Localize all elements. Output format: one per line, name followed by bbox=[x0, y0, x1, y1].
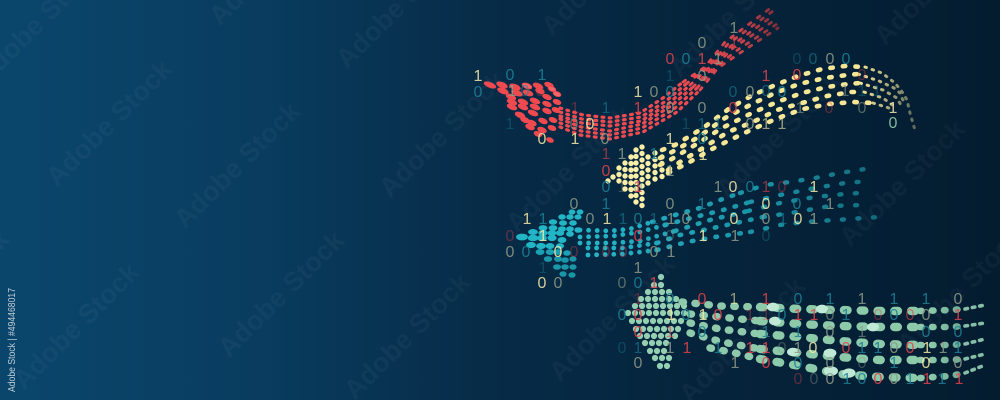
digits: gray: 0 bbox=[666, 100, 675, 117]
digits: red: 1 bbox=[730, 35, 739, 52]
digits: cream: 1 bbox=[474, 68, 483, 85]
green arrow tail edge bbox=[965, 305, 985, 373]
green arrow body near bbox=[682, 302, 760, 359]
digits: teal: 1 bbox=[906, 371, 915, 388]
digits: red: 0 bbox=[634, 228, 643, 245]
digits: cream: 0 bbox=[554, 244, 563, 261]
digits: red: 0 bbox=[874, 371, 883, 388]
digits: cream: 1 bbox=[810, 179, 819, 196]
digits: gray: 0 bbox=[698, 100, 707, 117]
digits: teal: 0 bbox=[794, 291, 803, 308]
digits: teal: 1 bbox=[714, 116, 723, 133]
digits: teal: 1 bbox=[762, 324, 771, 341]
digits: gray: 0 bbox=[634, 355, 643, 372]
digits: cream: 1 bbox=[699, 147, 708, 164]
digits: teal: 1 bbox=[682, 116, 691, 133]
digits: gray: 0 bbox=[889, 115, 898, 132]
yellow arrow body bbox=[660, 66, 873, 173]
digits: cream: 0 bbox=[538, 275, 547, 292]
yellow arrow tail bbox=[858, 67, 915, 130]
digits: cream: 1 bbox=[730, 291, 739, 308]
digits: teal: 0 bbox=[522, 244, 531, 261]
digits: teal: 1 bbox=[698, 116, 707, 133]
digits: teal: 1 bbox=[779, 211, 788, 228]
digits: gray: 1 bbox=[858, 291, 867, 308]
digits: teal: 1 bbox=[922, 291, 931, 308]
digits: gray: 0 bbox=[826, 51, 835, 68]
digits: cream: 1 bbox=[523, 211, 532, 228]
digits: gray: 1 bbox=[939, 340, 948, 357]
digits: gray: 1 bbox=[826, 196, 835, 213]
watermarks: Adobe Stock bbox=[500, 99, 639, 238]
digits: teal: 1 bbox=[506, 116, 515, 133]
watermarks: Adobe Stock bbox=[168, 95, 307, 234]
digits: red: 0 bbox=[794, 371, 803, 388]
digits: gray: 0 bbox=[858, 100, 867, 117]
green arrow highlights bbox=[767, 303, 879, 378]
digits: cream: 1 bbox=[666, 131, 675, 148]
digits: teal: 0 bbox=[778, 84, 787, 101]
arrow: yellow bbox=[608, 66, 915, 206]
teal arrow body near bbox=[580, 222, 675, 255]
digits: teal: 0 bbox=[474, 84, 483, 101]
digits: red: 1 bbox=[698, 51, 707, 68]
digits: teal: 1 bbox=[842, 307, 851, 324]
digits: red: 1 bbox=[955, 371, 964, 388]
watermarks: Adobe Stock bbox=[373, 64, 512, 203]
digits: gray: 0 bbox=[954, 291, 963, 308]
digits: teal: 0 bbox=[762, 83, 771, 100]
digits: red: 0 bbox=[714, 307, 723, 324]
digits: gray: 0 bbox=[666, 196, 675, 213]
digits: red: 0 bbox=[858, 67, 867, 84]
digits: teal: 0 bbox=[634, 179, 643, 196]
digits: cream: 1 bbox=[778, 116, 787, 133]
digits: gray: 0 bbox=[762, 211, 771, 228]
digits: teal: 1 bbox=[890, 355, 899, 372]
digits: teal: 0 bbox=[762, 228, 771, 245]
yellow arrow head bbox=[608, 147, 662, 206]
digits: red: 1 bbox=[954, 307, 963, 324]
digits: teal: 1 bbox=[539, 211, 548, 228]
digits: teal: 1 bbox=[634, 340, 643, 357]
digits: red: 0 bbox=[698, 291, 707, 308]
digits: gray: 1 bbox=[667, 211, 676, 228]
digits: gray: 1 bbox=[634, 260, 643, 277]
digits: cream: 1 bbox=[699, 228, 708, 245]
side caption: Adobe Stock | #494468017 bbox=[7, 288, 18, 392]
digits: red: 1 bbox=[634, 100, 643, 117]
digits: teal: 0 bbox=[618, 307, 627, 324]
teal arrow body middle bbox=[652, 193, 763, 250]
digits: gray: 0 bbox=[650, 84, 659, 101]
digits: red: 0 bbox=[906, 307, 915, 324]
digits: red: 1 bbox=[746, 307, 755, 324]
digits: teal: 1 bbox=[874, 340, 883, 357]
digits: cream: 1 bbox=[762, 116, 771, 133]
digits: red: 0 bbox=[666, 51, 675, 68]
arrow: red bbox=[484, 7, 778, 143]
digits: teal: 1 bbox=[938, 371, 947, 388]
digits: teal: 1 bbox=[858, 340, 867, 357]
digits: gray: 0 bbox=[826, 355, 835, 372]
digits: gray bbox=[506, 20, 963, 388]
digits: teal: 0 bbox=[746, 179, 755, 196]
digits: teal: 0 bbox=[634, 275, 643, 292]
digits: gray: 0 bbox=[858, 355, 867, 372]
digits: cream: 0 bbox=[730, 211, 739, 228]
green arrow head bbox=[628, 277, 685, 366]
digits: teal: 1 bbox=[619, 211, 628, 228]
digits: red: 0 bbox=[778, 179, 787, 196]
digits: teal: 0 bbox=[634, 211, 643, 228]
digits: gray: 0 bbox=[586, 211, 595, 228]
digits: gray: 1 bbox=[714, 51, 723, 68]
digits: teal: 0 bbox=[729, 84, 738, 101]
teal arrow body far bbox=[740, 169, 880, 232]
digits: gray: 1 bbox=[666, 163, 675, 180]
digits: teal: 1 bbox=[954, 340, 963, 357]
digits: red: 0 bbox=[570, 244, 579, 261]
digits: gray: 0 bbox=[698, 68, 707, 85]
digits: teal: 0 bbox=[698, 131, 707, 148]
digits: teal bbox=[474, 51, 963, 388]
watermarks: Adobe Stock bbox=[710, 65, 849, 204]
digits: red: 1 bbox=[762, 68, 771, 85]
digits: gray: 0 bbox=[601, 131, 610, 148]
digits: gray: 0 bbox=[826, 324, 835, 341]
digits: gray: 0 bbox=[778, 340, 787, 357]
watermarks: Adobe Stock bbox=[833, 113, 972, 252]
digits: teal: 1 bbox=[794, 324, 803, 341]
digits: gray: 1 bbox=[508, 83, 517, 100]
digits: teal: 0 bbox=[682, 307, 691, 324]
digits: red: 1 bbox=[762, 340, 771, 357]
digits: red: 0 bbox=[906, 340, 915, 357]
digits: teal: 0 bbox=[858, 371, 867, 388]
red arrow body near bbox=[560, 82, 700, 139]
digits: red: 0 bbox=[874, 307, 883, 324]
digits: red: 1 bbox=[666, 324, 675, 341]
digits: gray: 0 bbox=[826, 307, 835, 324]
digits: teal: 1 bbox=[538, 67, 547, 84]
digits: gray: 1 bbox=[810, 211, 819, 228]
digits: cream: 1 bbox=[923, 340, 932, 357]
arrow: teal bbox=[516, 169, 880, 277]
digits: teal: 0 bbox=[698, 324, 707, 341]
digits: cream: 1 bbox=[634, 84, 643, 101]
digits: teal: 0 bbox=[506, 67, 515, 84]
digits: teal: 0 bbox=[809, 51, 818, 68]
digits: teal: 0 bbox=[890, 307, 899, 324]
digits: cream bbox=[474, 68, 932, 372]
digits: cream: 0 bbox=[922, 355, 931, 372]
red arrow body far bbox=[683, 7, 778, 90]
digits: teal: 1 bbox=[890, 291, 899, 308]
watermarks: Adobe Stock bbox=[543, 248, 682, 387]
digits: red: 0 bbox=[793, 67, 802, 84]
digits: cream: 1 bbox=[667, 307, 676, 324]
digits: teal: 1 bbox=[602, 100, 611, 117]
digits: teal: 0 bbox=[618, 340, 627, 357]
digits: red: 0 bbox=[602, 244, 611, 261]
binary digits field bbox=[474, 20, 964, 388]
watermarks: Adobe Stock bbox=[7, 256, 146, 395]
digits: cream: 1 bbox=[571, 131, 580, 148]
digits: gray: 0 bbox=[554, 275, 563, 292]
digits: teal: 1 bbox=[539, 260, 548, 277]
digits: teal: 1 bbox=[843, 371, 852, 388]
digits: teal: 0 bbox=[842, 51, 851, 68]
digits: gray: 1 bbox=[667, 244, 676, 261]
digits: gray: 0 bbox=[618, 275, 627, 292]
digits: red: 0 bbox=[619, 244, 628, 261]
digits: cream: 1 bbox=[699, 307, 708, 324]
digits: gray: 1 bbox=[796, 100, 805, 117]
digits: teal: 0 bbox=[922, 324, 931, 341]
digits: red: 1 bbox=[794, 307, 803, 324]
digits: teal: 1 bbox=[826, 291, 835, 308]
digits: gray: 0 bbox=[506, 244, 515, 261]
digits: teal: 1 bbox=[873, 83, 882, 100]
digits: teal: 0 bbox=[793, 196, 802, 213]
digits: gray: 0 bbox=[922, 307, 931, 324]
teal arrow head bbox=[516, 210, 583, 277]
digits: red: 0 bbox=[729, 100, 738, 117]
arrow: green bbox=[628, 277, 985, 378]
green arrow body main bbox=[760, 307, 920, 378]
digits: cream: 0 bbox=[586, 116, 595, 133]
digits: gray: 0 bbox=[890, 340, 899, 357]
digits: red: 1 bbox=[810, 307, 819, 324]
digits: gray: 0 bbox=[650, 244, 659, 261]
digits: red: 0 bbox=[634, 324, 643, 341]
digits: gray: 1 bbox=[731, 228, 740, 245]
red arrow head bbox=[484, 81, 562, 143]
digits: gray: 1 bbox=[794, 340, 803, 357]
digits: teal: 0 bbox=[682, 51, 691, 68]
digits: gray: 1 bbox=[618, 146, 627, 163]
digits: red: 0 bbox=[762, 355, 771, 372]
digits: teal: 0 bbox=[666, 84, 675, 101]
digits: cream: 0 bbox=[762, 196, 771, 213]
digits: teal: 1 bbox=[602, 196, 611, 213]
digits: red: 0 bbox=[842, 340, 851, 357]
digits: teal: 0 bbox=[778, 307, 787, 324]
digits: gray: 0 bbox=[826, 371, 835, 388]
digits: cream: 0 bbox=[809, 340, 818, 357]
digits: cream: 1 bbox=[539, 228, 548, 245]
digits: cream: 0 bbox=[794, 211, 803, 228]
digits: gray: 0 bbox=[682, 211, 691, 228]
digits: gray: 0 bbox=[570, 196, 579, 213]
digits: red bbox=[506, 35, 964, 388]
digits: red: 1 bbox=[923, 371, 932, 388]
watermarks: Adobe Stock bbox=[212, 224, 351, 363]
digits: teal: 0 bbox=[954, 324, 963, 341]
digits: red: 1 bbox=[683, 340, 692, 357]
digits: gray: 1 bbox=[730, 20, 739, 37]
digits: red: 1 bbox=[571, 100, 580, 117]
digits: red: 1 bbox=[634, 179, 643, 196]
green arrow tail bbox=[920, 309, 965, 378]
digits: teal: 0 bbox=[666, 291, 675, 308]
digits: teal: 1 bbox=[650, 146, 659, 163]
digits: red: 0 bbox=[536, 83, 545, 100]
digits: gray: 0 bbox=[570, 116, 579, 133]
digits: gray: 0 bbox=[746, 116, 755, 133]
digits: red: 1 bbox=[634, 291, 643, 308]
digits: teal: 1 bbox=[666, 68, 675, 85]
digits: red: 0 bbox=[602, 163, 611, 180]
digits: gray: 1 bbox=[841, 83, 850, 100]
digits: cream: 1 bbox=[889, 100, 898, 117]
digits: teal: 0 bbox=[602, 179, 611, 196]
digits: gray: 0 bbox=[954, 355, 963, 372]
digits: red: 1 bbox=[650, 275, 659, 292]
digits: cream: 0 bbox=[538, 131, 547, 148]
digits: red: 1 bbox=[746, 340, 755, 357]
digits: gray: 1 bbox=[618, 179, 627, 196]
digits: gray: 0 bbox=[666, 228, 675, 245]
digits: cream: 1 bbox=[603, 211, 612, 228]
digits: gray: 0 bbox=[746, 84, 755, 101]
digits: red: 0 bbox=[634, 307, 643, 324]
digits: red: 1 bbox=[762, 307, 771, 324]
digits: teal: 1 bbox=[858, 83, 867, 100]
digits: teal: 1 bbox=[714, 340, 723, 357]
digits: gray: 1 bbox=[714, 179, 723, 196]
digits: gray: 0 bbox=[890, 371, 899, 388]
digits: gray: 0 bbox=[810, 371, 819, 388]
watermarks: Adobe Stock bbox=[40, 53, 179, 192]
digits: teal: 1 bbox=[650, 211, 659, 228]
digits: cream: 0 bbox=[729, 179, 738, 196]
digits: teal: 0 bbox=[793, 51, 802, 68]
digits: gray: 1 bbox=[858, 324, 867, 341]
digits: gray: 1 bbox=[731, 355, 740, 372]
digits: red: 1 bbox=[762, 179, 771, 196]
digits: gray: 1 bbox=[666, 340, 675, 357]
digits: red: 1 bbox=[602, 146, 611, 163]
digits: gray: 0 bbox=[698, 35, 707, 52]
digits: teal: 1 bbox=[698, 196, 707, 213]
digits: teal: 0 bbox=[794, 355, 803, 372]
digits: red: 0 bbox=[825, 100, 834, 117]
digits: red: 0 bbox=[506, 228, 515, 245]
digits: teal: 0 bbox=[521, 83, 530, 100]
digits: red: 1 bbox=[762, 291, 771, 308]
